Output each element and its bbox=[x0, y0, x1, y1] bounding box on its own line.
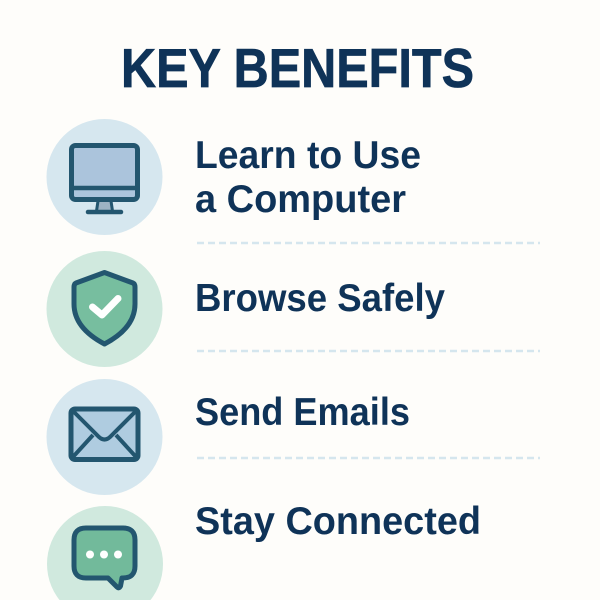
icon: envelope bbox=[46, 379, 162, 495]
icon: shield with check bbox=[46, 251, 162, 367]
benefit row: browse safely bbox=[46, 251, 445, 367]
benefit label: Stay Connected bbox=[195, 500, 481, 543]
benefit label: a Computer bbox=[195, 178, 406, 221]
icon: computer monitor bbox=[46, 119, 162, 235]
benefit label: Browse Safely bbox=[195, 277, 445, 320]
benefit row: stay connected bbox=[47, 500, 481, 600]
benefit label: Send Emails bbox=[195, 391, 410, 434]
title: KEY BENEFITS bbox=[121, 37, 474, 99]
icon: speech bubble bbox=[47, 506, 163, 600]
benefit row: learn to use a computer bbox=[46, 119, 421, 235]
benefit label: Learn to Use bbox=[195, 134, 421, 177]
benefit row: send emails bbox=[46, 379, 410, 495]
